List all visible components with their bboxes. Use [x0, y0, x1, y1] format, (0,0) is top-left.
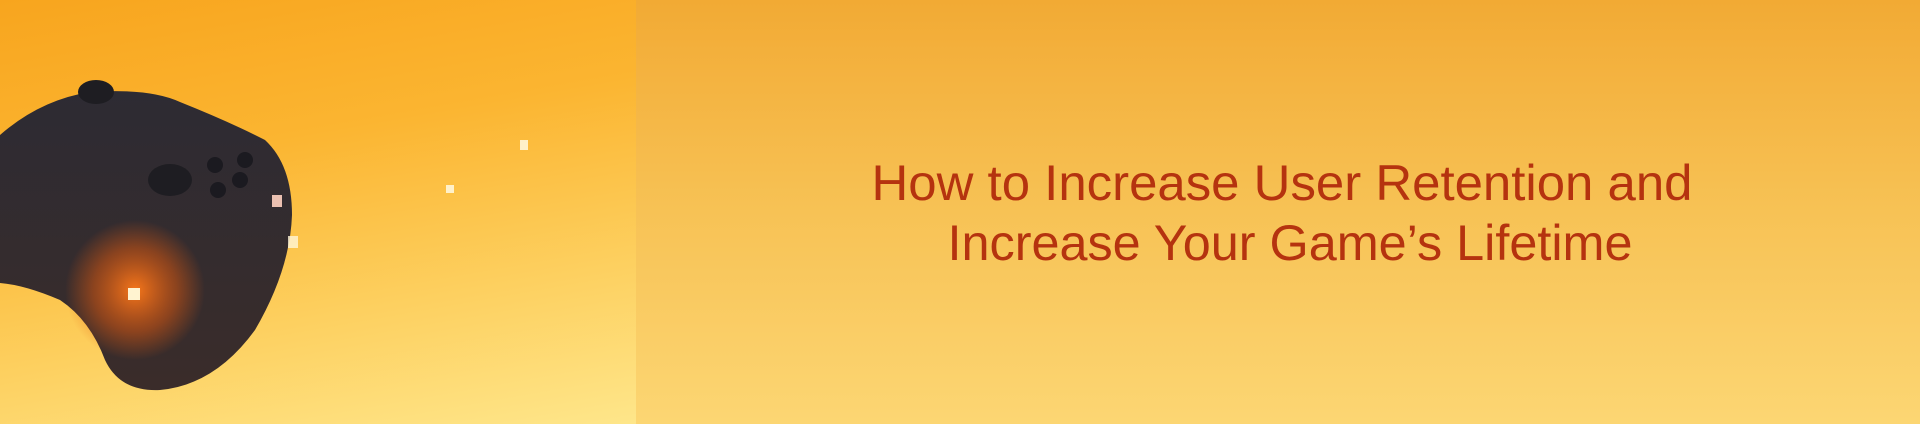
icon: game controller [0, 80, 292, 390]
title: Increase Your Game’s Lifetime [948, 215, 1632, 271]
panel: title background [636, 0, 1920, 424]
title: How to Increase User Retention and [872, 155, 1692, 211]
panel: photo of game controller [0, 0, 636, 424]
